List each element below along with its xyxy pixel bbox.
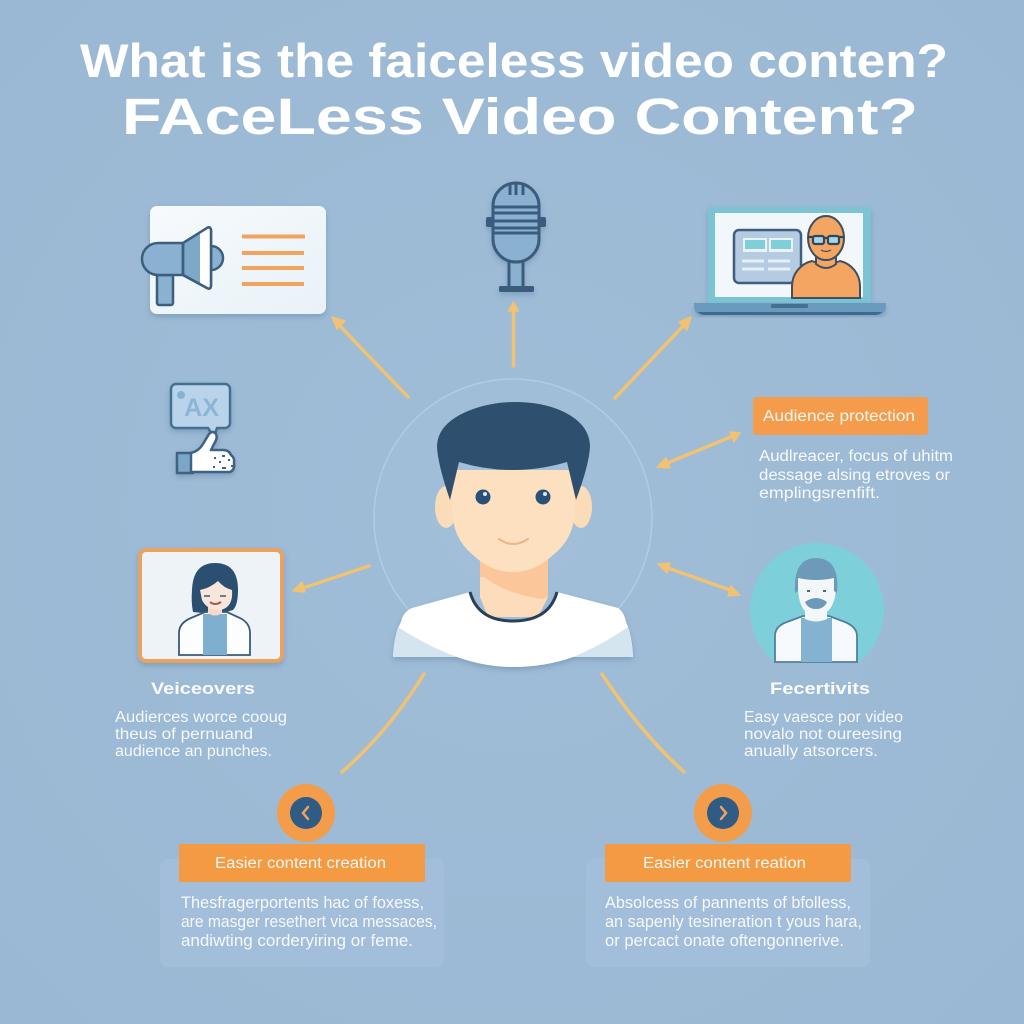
halo circle — [374, 379, 652, 657]
text: voiceovers description: audience an punches. — [115, 743, 272, 760]
text: audience description: dessage alsing etroves or — [759, 467, 950, 484]
icon: left chevron badge — [277, 784, 335, 842]
panel: facecrivits portrait circle — [750, 543, 884, 663]
background panel — [586, 859, 870, 967]
hair — [437, 402, 590, 500]
list lines — [242, 234, 305, 286]
arrow: to microphone — [508, 302, 518, 366]
icon: right chevron badge — [694, 784, 752, 842]
icon: microphone — [486, 183, 546, 292]
shirt — [393, 592, 633, 667]
arrow: voiceovers — [293, 566, 369, 592]
background panel — [160, 859, 444, 967]
screen panel — [734, 230, 801, 283]
text: audience description — [759, 448, 953, 502]
icon: speech bubble with thumbs up — [171, 384, 234, 473]
arrows — [293, 302, 740, 772]
presenter — [792, 216, 860, 298]
description: or percact onate oftengonnerive. — [605, 932, 844, 950]
portrait: man — [775, 558, 857, 662]
description: Absolcess of pannents of bfolless, — [605, 894, 851, 912]
label: audience protection — [753, 397, 928, 435]
panel: voiceovers portrait card — [140, 550, 282, 661]
text: facecrivits description: Easy vaesce por video — [744, 709, 903, 726]
text: facecrivits description — [744, 709, 903, 760]
description — [181, 894, 437, 950]
face — [452, 470, 575, 572]
heading: voiceovers: Veiceovers — [151, 679, 255, 698]
text: facecrivits description: novalo not oureesing — [744, 726, 902, 743]
title — [80, 35, 948, 145]
arrow: to laptop — [615, 317, 691, 398]
arrow: to megaphone — [332, 317, 408, 397]
description: Thesfragerportents hac of foxess, — [181, 894, 424, 912]
arrow: audience protection — [657, 432, 740, 468]
description: an sapenly tesineration t yous hara, — [605, 913, 862, 931]
description: are masger resethert vica messaces, — [181, 913, 437, 931]
text: facecrivits description: anually atsorcers. — [744, 743, 878, 760]
eyes — [476, 490, 550, 504]
description: andiwting corderyiring or feme. — [181, 932, 413, 950]
label: Easier content reation — [643, 855, 806, 872]
icon: megaphone — [142, 227, 223, 305]
ears — [435, 486, 592, 528]
title: FAceLess Video Content? — [122, 88, 918, 145]
label — [605, 844, 851, 882]
thumbs up hand — [177, 432, 234, 473]
laptop base — [694, 303, 886, 315]
arrow: facecrivits — [658, 563, 740, 596]
smile — [499, 539, 528, 544]
neck — [480, 555, 548, 617]
text: voiceovers description: theus of pernuand — [115, 726, 253, 743]
icon: speech bubble with thumbs up: AX — [184, 394, 219, 422]
panel: lower-left easier content creation — [160, 784, 444, 967]
panel: central faceless figure — [374, 379, 652, 667]
description — [605, 894, 862, 950]
text: voiceovers description: Audierces worce coоug — [115, 709, 287, 726]
panel: lower-right easier content reation — [586, 784, 870, 967]
arrow: lower right — [602, 674, 684, 772]
text: audience description: Audlreacer, focus of uhitm — [759, 448, 953, 465]
label: Easier content creation — [215, 855, 386, 872]
icon: laptop with presenter — [694, 207, 886, 315]
heading: facecrivits: Fecertivits — [770, 679, 870, 698]
label: audience protection: Audience protection — [763, 408, 915, 425]
text: voiceovers description — [115, 709, 287, 760]
portrait: woman — [179, 563, 250, 655]
panel: megaphone card — [142, 206, 326, 314]
arrow: lower left — [342, 674, 424, 772]
text: audience description: emplingsrenfift. — [759, 485, 880, 502]
label — [179, 844, 425, 882]
title: What is the faiceless video conten? — [80, 35, 948, 88]
